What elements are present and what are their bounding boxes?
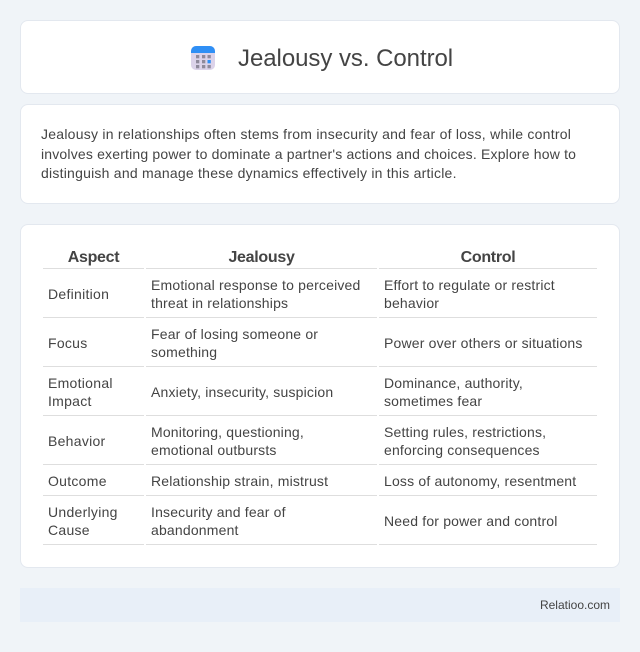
row: underlying cause: abandonment (151, 522, 239, 538)
footer bar (20, 588, 620, 622)
row: focus (48, 326, 583, 360)
row: behavior: Monitoring, questioning, (151, 424, 304, 440)
row: definition: Effort to regulate or restrict (384, 277, 555, 293)
row: emotional impact (48, 375, 523, 409)
row: emotional impact: Impact (48, 393, 92, 409)
row: definition: behavior (384, 295, 439, 311)
icon: calendar (191, 46, 215, 70)
row: underlying cause: Need for power and control (384, 513, 558, 529)
row: outcome (48, 473, 576, 489)
row: underlying cause (48, 504, 558, 538)
footer credit: Relatioo.com (540, 598, 610, 612)
row: focus: something (151, 344, 217, 360)
row: focus: Focus (48, 335, 88, 351)
row: underlying cause: Insecurity and fear of (151, 504, 286, 520)
header row: Aspect (68, 249, 119, 266)
row: outcome: Relationship strain, mistrust (151, 473, 328, 489)
row: focus: Power over others or situations (384, 335, 583, 351)
intro text: distinguish and manage these dynamics effectively in this article. (41, 165, 457, 181)
row: underlying cause: Underlying (48, 504, 118, 520)
row: underlying cause: Cause (48, 522, 90, 538)
row: definition: Emotional response to perceived (151, 277, 360, 293)
row: emotional impact: sometimes fear (384, 393, 482, 409)
row: emotional impact: Emotional (48, 375, 113, 391)
header row: Jealousy (228, 249, 295, 266)
row: definition: threat in relationships (151, 295, 288, 311)
title: Jealousy vs. Control (238, 45, 453, 72)
row: behavior: Behavior (48, 433, 106, 449)
intro panel (20, 104, 620, 204)
row: behavior: emotional outbursts (151, 442, 277, 458)
header panel (20, 20, 620, 94)
row: outcome: Loss of autonomy, resentment (384, 473, 576, 489)
row: behavior (48, 424, 546, 458)
intro text (41, 126, 576, 181)
row: outcome: Outcome (48, 473, 107, 489)
row: definition: Definition (48, 286, 109, 302)
intro text: Jealousy in relationships often stems from insecurity and fear of loss, while control (41, 126, 571, 142)
row: behavior: enforcing consequences (384, 442, 540, 458)
row: behavior: Setting rules, restrictions, (384, 424, 546, 440)
row: emotional impact: Dominance, authority, (384, 375, 523, 391)
table panel (20, 224, 620, 568)
header row: Control (461, 249, 515, 266)
row: definition (48, 277, 555, 311)
row: emotional impact: Anxiety, insecurity, suspicion (151, 384, 333, 400)
intro text: involves exerting power to dominate a partner's actions and choices. Explore how to (41, 146, 576, 162)
header row (68, 249, 515, 266)
row: focus: Fear of losing someone or (151, 326, 318, 342)
